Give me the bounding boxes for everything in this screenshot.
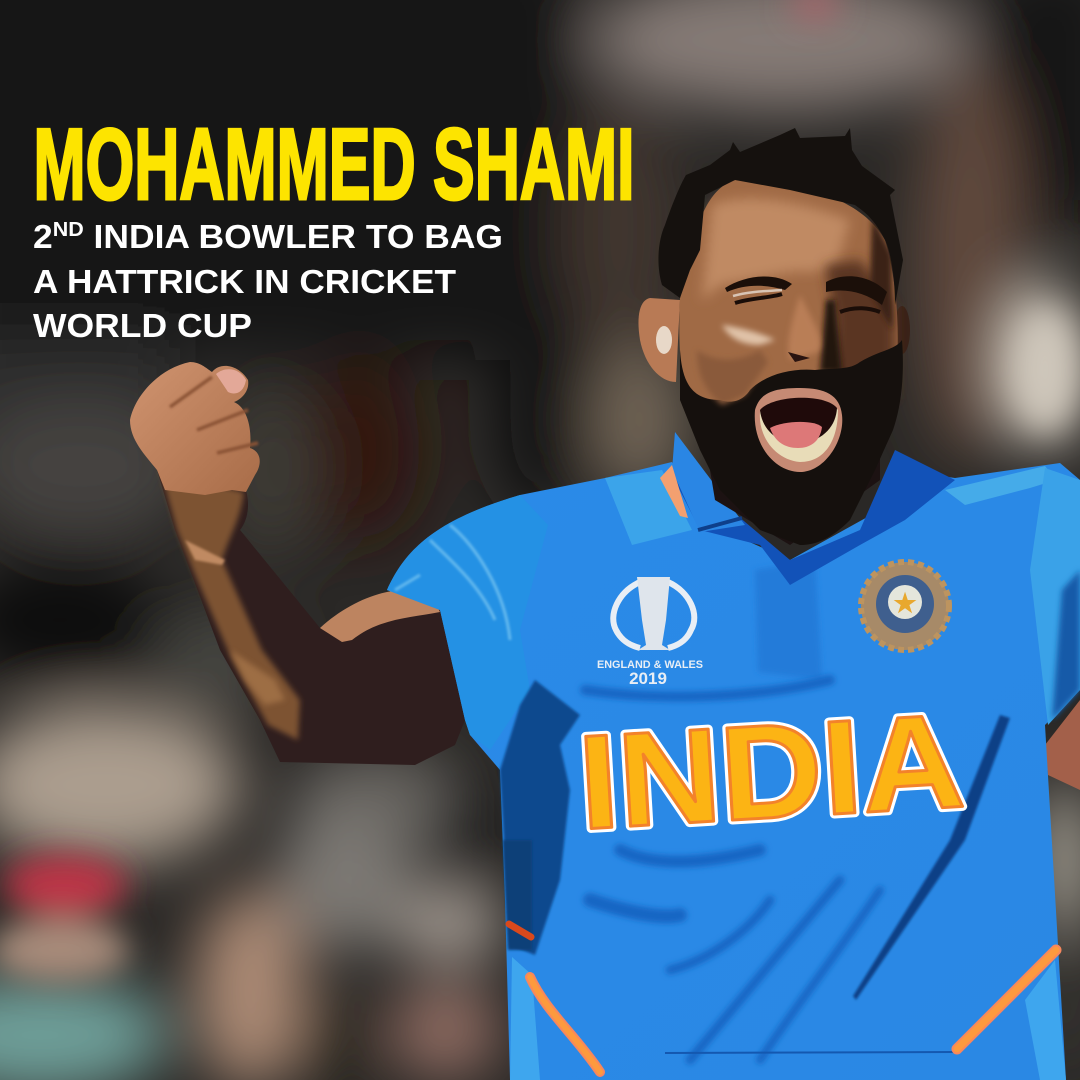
clenched fist (130, 362, 260, 495)
raised arm (157, 470, 465, 765)
ears (638, 298, 910, 382)
hair (658, 128, 903, 305)
nostril (788, 352, 810, 362)
fold shading (585, 680, 880, 1060)
BCCI badge: ★ (893, 588, 917, 618)
stubble cheek (697, 350, 768, 405)
open mouth (755, 388, 842, 472)
cheek highlight (722, 325, 775, 345)
face right shadow (825, 260, 895, 400)
jersey body (387, 462, 1080, 1080)
subheading: INDIA BOWLER TO BAG (84, 218, 503, 255)
BCCI badge (861, 562, 949, 650)
subheading: A HATTRICK IN CRICKET (33, 263, 456, 300)
INDIA chest lettering: INDIA (575, 686, 968, 858)
nose shadow (820, 300, 842, 372)
heading: player name: MOHAMMED SHAMI (34, 109, 634, 221)
beard (680, 340, 903, 545)
subheading: ND (53, 219, 84, 241)
world cup logo: ENGLAND & WALES (597, 659, 703, 671)
subheading (33, 218, 503, 344)
world cup logo (597, 577, 703, 688)
neck (700, 410, 880, 545)
collar (660, 432, 955, 585)
player figure (130, 128, 1080, 1080)
forehead highlight (702, 199, 850, 300)
nose (788, 295, 820, 360)
subheading: WORLD CUP (33, 307, 252, 344)
right arm stub (1045, 700, 1080, 790)
eyes and brows (725, 276, 887, 312)
orange jersey stripes (509, 924, 1056, 1072)
world cup logo: 2019 (629, 669, 667, 688)
INDIA chest lettering: INDIA (575, 686, 968, 858)
head (638, 128, 910, 545)
subheading: 2 (33, 218, 51, 255)
face (679, 180, 898, 420)
